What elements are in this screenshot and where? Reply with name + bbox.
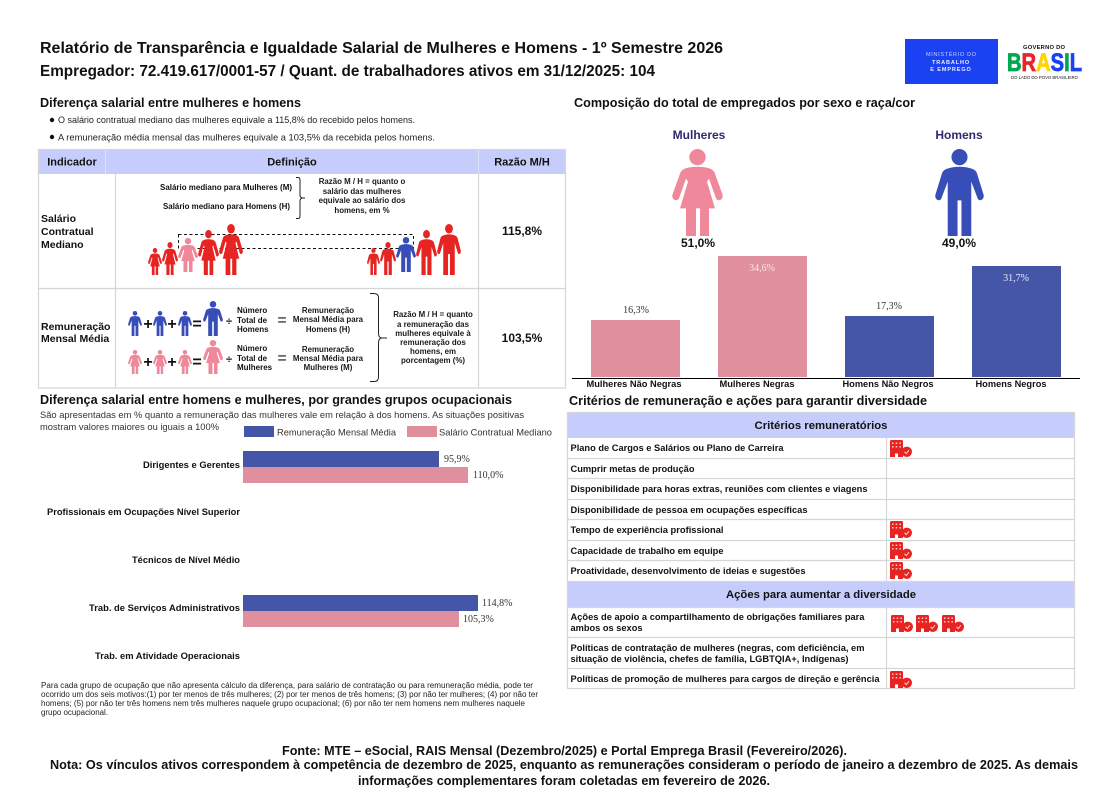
icon group: men by salary (367, 224, 461, 275)
header: ações para aumentar a diversidade: Ações para aumentar a diversidade (726, 589, 916, 601)
row: remuneração mensal média: mulheres equivale à (395, 329, 471, 338)
icon formula: men: Homens (237, 325, 269, 334)
pictogram: mulheres 51,0% (672, 128, 726, 250)
logo: Ministério do Trabalho e Emprego: E EMPREGO (930, 67, 972, 73)
criteria rows: Capacidade de trabalho em equipe (570, 546, 724, 556)
source and note (50, 744, 1078, 788)
bar: homens não negros: Homens Não Negros (842, 379, 934, 389)
bullet list of summary ratios: A remuneração média mensal das mulheres equivale a 103,5% da recebida pelos homens. (58, 132, 435, 142)
bar: mulheres negras: 34,6% (749, 263, 775, 274)
pictogram: homens 49,0%: 49,0% (942, 236, 976, 250)
action rows: situação de violência, chefes de família, LGBTQIA+, Indígenas) (570, 654, 848, 664)
row: salário contratual mediano: Contratual (41, 226, 94, 238)
table header: Razão M/H (494, 156, 550, 168)
legend: Remuneração Mensal Média (277, 428, 397, 438)
criteria rows (570, 443, 868, 576)
criteria rows: Disponibilidade para horas extras, reuniões com clientes e viagens (570, 484, 868, 494)
icon formula: men: + (143, 316, 153, 333)
icon: brace (296, 178, 305, 218)
bar: mulheres não negras (586, 305, 682, 389)
row: remuneração mensal média (41, 294, 543, 382)
row: remuneração mensal média: Mensal Média para (293, 354, 364, 363)
icon formula: men: ÷ (226, 316, 232, 328)
criteria rows: Proatividade, desenvolvimento de ideias e sugestões (570, 566, 806, 576)
median comparison box (178, 234, 414, 248)
criteria rows: Cumprir metas de produção (570, 464, 695, 474)
icon formula: women: Mulheres (237, 363, 273, 372)
heading: diferença salarial: Diferença salarial entre mulheres e homens (40, 96, 301, 110)
icon formula: women (128, 340, 287, 374)
row: salário contratual mediano: equivale ao salário dos (319, 196, 406, 205)
icon formula: men: = (192, 316, 202, 333)
legend: Salário Contratual Mediano (439, 428, 552, 438)
bullet list of summary ratios (50, 115, 435, 142)
group: dirigentes e gerentes: 110,0% (473, 470, 503, 481)
group: dirigentes e gerentes (143, 451, 503, 483)
bar: mulheres não negras: 16,3% (623, 305, 649, 316)
row: salário contratual mediano: homens, em % (334, 206, 390, 215)
footnote (41, 681, 538, 717)
logo: Ministério do Trabalho e Emprego (905, 39, 998, 84)
icon formula: women: = (192, 354, 202, 371)
bar: homens não negros: 17,3% (876, 301, 902, 312)
icon: large brace (370, 294, 387, 382)
group: técnicos: Técnicos de Nível Médio (132, 555, 240, 565)
logo: Ministério do Trabalho e Emprego: MINISTÉRIO DO (926, 51, 977, 58)
criteria rows: Tempo de experiência profissional (570, 525, 724, 535)
description text (40, 410, 524, 432)
footnote: homens; (5) por não ter três homens nem três mulheres naquele grupo ocupacional; (6) por não ter nem homens nem mulheres naquele (41, 699, 526, 708)
row: salário contratual mediano: Mediano (41, 239, 84, 251)
action rows: Políticas de contratação de mulheres (negras, com deficiência, em (570, 643, 864, 653)
bar: mulheres negras: Mulheres Negras (720, 379, 794, 389)
criteria rows: Disponibilidade de pessoa em ocupações específicas (570, 505, 808, 515)
group: dirigentes e gerentes: Dirigentes e Gerentes (143, 460, 240, 470)
report title: Empregador: 72.419.617/0001-57 / Quant. de trabalhadores ativos em 31/12/2025: 104 (40, 63, 655, 80)
group: serviços administrativos: Trab. de Serviços Administrativos (89, 603, 240, 613)
legend (244, 426, 552, 438)
bullet list of summary ratios: O salário contratual mediano das mulheres equivale a 115,8% do recebido pelos homens. (58, 115, 415, 125)
footnote: ocorrido um dos seis motivos:(1) por ter menos de três mulheres; (2) por ter menos de três homens; (3) por não ter mulheres; (4) por não ter (41, 690, 538, 699)
bar: mulheres não negras: Mulheres Não Negras (586, 379, 682, 389)
bar: mulheres negras (718, 256, 807, 389)
row: salário contratual mediano: Salário mediano para Mulheres (M) (160, 183, 292, 192)
icons: company with check (890, 440, 964, 688)
action rows (570, 612, 880, 684)
row: remuneração mensal média: Homens (H) (306, 325, 351, 334)
action rows: ambos os sexos (570, 623, 642, 633)
row: salário contratual mediano: Razão M / H = quanto o (319, 177, 405, 186)
footnote: Para cada grupo de ocupação que não apresenta cálculo da diferença, para salário de contratação ou para remuneração média, pode ter (41, 681, 533, 690)
heading: composição: Composição do total de empregados por sexo e raça/cor (574, 96, 915, 110)
row: salário contratual mediano: Salário (41, 213, 76, 225)
bar: homens negros: Homens Negros (976, 379, 1046, 389)
action rows: Políticas de promoção de mulheres para cargos de direção e gerência (570, 674, 880, 684)
icon formula: men: + (167, 316, 177, 333)
row: remuneração mensal média: a remuneração das (397, 320, 470, 329)
icon formula: women: ÷ (226, 354, 232, 366)
row: remuneração mensal média: Mensal Média (41, 333, 109, 345)
table header (38, 149, 566, 174)
group: serviços administrativos (89, 595, 512, 627)
icon formula: women: = (277, 350, 287, 367)
group: serviços administrativos: 105,3% (463, 614, 494, 625)
row: remuneração mensal média: 103,5% (502, 331, 543, 345)
row: remuneração mensal média: remuneração dos (400, 338, 467, 347)
heading: critérios: Critérios de remuneração e ações para garantir diversidade (569, 394, 927, 408)
icon formula: women: + (143, 354, 153, 371)
logo: Ministério do Trabalho e Emprego: TRABALHO (932, 60, 970, 66)
group: serviços administrativos: 114,8% (482, 598, 512, 609)
logo: Governo do Brasil: BRASIL (1007, 49, 1082, 77)
bar: homens negros (972, 266, 1061, 389)
row: remuneração mensal média: Razão M / H = quanto (393, 310, 473, 319)
row: remuneração mensal média: Mensal Média para (293, 315, 364, 324)
panel: indicator table (38, 149, 566, 388)
source and note: Nota: Os vínculos ativos correspondem à competência de dezembro de 2025, enquanto as remunerações consideram o período de janeiro a dezembro de 2025. As demais (50, 758, 1078, 772)
report title: Relatório de Transparência e Igualdade Salarial de Mulheres e Homens - 1º Semestre 2026 (40, 40, 723, 57)
table header: Definição (267, 156, 317, 168)
panel: criteria table (567, 412, 1075, 688)
source and note: Fonte: MTE – eSocial, RAIS Mensal (Dezembro/2025) e Portal Emprega Brasil (Fevereiro/2026). (282, 744, 847, 758)
bar: homens negros: 31,7% (1003, 273, 1029, 284)
description text: São apresentadas em % quanto a remuneração das mulheres vale em relação à dos homens. As situações positivas (40, 410, 524, 420)
row: salário contratual mediano: Salário mediano para Homens (H) (163, 202, 290, 211)
header: ações para aumentar a diversidade (567, 581, 1075, 607)
pictogram: mulheres 51,0%: Mulheres (673, 128, 726, 142)
icon formula: women: Número (237, 344, 267, 353)
group: profissionais: Profissionais em Ocupações Nível Superior (47, 507, 240, 517)
row: remuneração mensal média: Remuneração (41, 321, 110, 333)
table header: Indicador (47, 156, 97, 168)
heading: diferença por grupos ocupacionais: Diferença salarial entre homens e mulheres, por grandes grupos ocupacionais (40, 393, 512, 407)
group: atividade operacionais: Trab. em Atividade Operacionais (95, 651, 240, 661)
header: critérios remuneratórios (567, 412, 1075, 438)
icon formula: men (128, 301, 287, 336)
bar: homens não negros (842, 301, 934, 389)
report title (40, 40, 723, 80)
row: remuneração mensal média: Remuneração (302, 345, 354, 354)
icon formula: women: Total de (237, 354, 268, 363)
row: remuneração mensal média: Mulheres (M) (304, 363, 353, 372)
logo: Governo do Brasil: GOVERNO DO (1023, 45, 1065, 51)
row: salário contratual mediano (41, 177, 542, 275)
icon formula: women: + (167, 354, 177, 371)
group: dirigentes e gerentes: 95,9% (444, 454, 470, 465)
action rows: Ações de apoio a compartilhamento de obrigações familiares para (570, 612, 865, 622)
row: remuneração mensal média: homens, em (410, 347, 456, 356)
horizontal bar chart: grupos ocupacionais (47, 451, 512, 661)
header: critérios remuneratórios: Critérios remuneratórios (754, 420, 888, 432)
bar chart: composição por sexo e raça/cor (572, 256, 1080, 389)
icon formula: men: Total de (237, 316, 268, 325)
footnote: grupo ocupacional. (41, 708, 108, 717)
icon formula: men: = (277, 312, 287, 329)
row: remuneração mensal média: porcentagem (%) (401, 356, 465, 365)
criteria rows: Plano de Cargos e Salários ou Plano de Carreira (570, 443, 784, 453)
pictogram: homens 49,0% (935, 128, 984, 250)
icon formula: men: Número (237, 306, 267, 315)
icon group: women by salary (148, 224, 243, 275)
pictogram: mulheres 51,0%: 51,0% (681, 236, 715, 250)
pictogram: homens 49,0%: Homens (935, 128, 983, 142)
row: salário contratual mediano: 115,8% (502, 224, 542, 238)
logo: Governo do Brasil: DO LADO DO POVO BRASILEIRO (1011, 75, 1079, 80)
source and note: informações complementares foram coletadas em fevereiro de 2026. (358, 774, 770, 788)
row: salário contratual mediano: salário das mulheres (323, 187, 402, 196)
description text: mostram valores maiores ou iguais a 100% (40, 422, 219, 432)
row: remuneração mensal média: Remuneração (302, 306, 354, 315)
